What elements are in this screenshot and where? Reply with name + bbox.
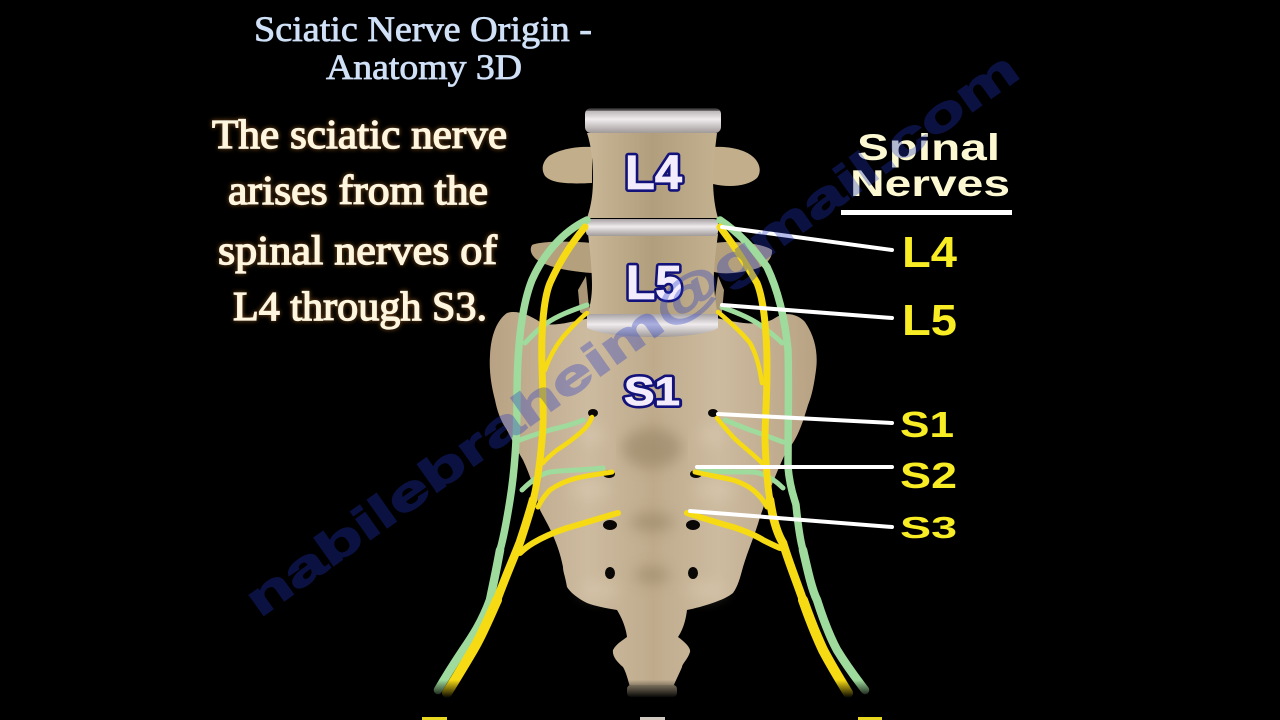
spinal nerve labels: S3 — [900, 510, 957, 545]
L5 posterior bump — [578, 276, 724, 318]
L5 transverse processes — [531, 242, 772, 273]
bottom fade — [420, 680, 890, 698]
sacrum highlights — [570, 425, 735, 598]
label outlines: S1 — [624, 370, 680, 414]
label fills — [624, 147, 682, 414]
top fade — [575, 100, 731, 110]
spinal nerves heading: Spinal — [857, 127, 1000, 168]
spinal nerve labels: S2 — [900, 455, 957, 496]
description text: L4 through S3. — [233, 283, 487, 329]
description text: spinal nerves of — [218, 227, 497, 273]
label fills: S1 — [624, 370, 680, 414]
L4 vertebral body — [587, 133, 718, 218]
description text: The sciatic nerve — [212, 111, 507, 157]
green nerves — [438, 220, 865, 690]
intervertebral disc L4-L5 — [586, 219, 718, 236]
label fills: L4 — [625, 147, 682, 200]
title — [254, 9, 592, 87]
sacrum shading — [622, 428, 682, 583]
spinal nerve labels: S1 — [900, 404, 954, 445]
watermark: nabilebraheim@gmail.com — [235, 41, 1028, 626]
bottom cropped fragments — [422, 717, 882, 720]
label outlines: L5 — [626, 257, 682, 310]
description text: arises from the — [228, 167, 488, 213]
label outlines — [624, 147, 682, 414]
spinal nerves heading — [841, 127, 1012, 215]
title: Anatomy 3D — [326, 47, 522, 87]
intervertebral disc top — [585, 108, 721, 133]
coccyx tip — [627, 685, 677, 697]
spinal nerve labels — [900, 228, 958, 545]
L5 vertebral body — [587, 234, 718, 316]
label outlines: L4 — [625, 147, 682, 200]
sacrum — [490, 312, 817, 687]
sacral foramina — [588, 409, 718, 579]
leader lines — [690, 227, 892, 527]
spinal nerve labels: L5 — [902, 296, 957, 345]
title: Sciatic Nerve Origin - — [254, 9, 592, 49]
label fills: L5 — [626, 257, 682, 310]
vertebra labels — [624, 147, 682, 414]
yellow nerves — [447, 227, 848, 693]
intervertebral disc L5-S1 — [587, 314, 718, 337]
spine and sacrum illustration — [490, 100, 817, 697]
description text — [212, 111, 507, 329]
spinal nerves heading: Nerves — [850, 163, 1010, 204]
L4 transverse processes — [543, 147, 760, 186]
spinal nerve labels: L4 — [902, 228, 958, 277]
